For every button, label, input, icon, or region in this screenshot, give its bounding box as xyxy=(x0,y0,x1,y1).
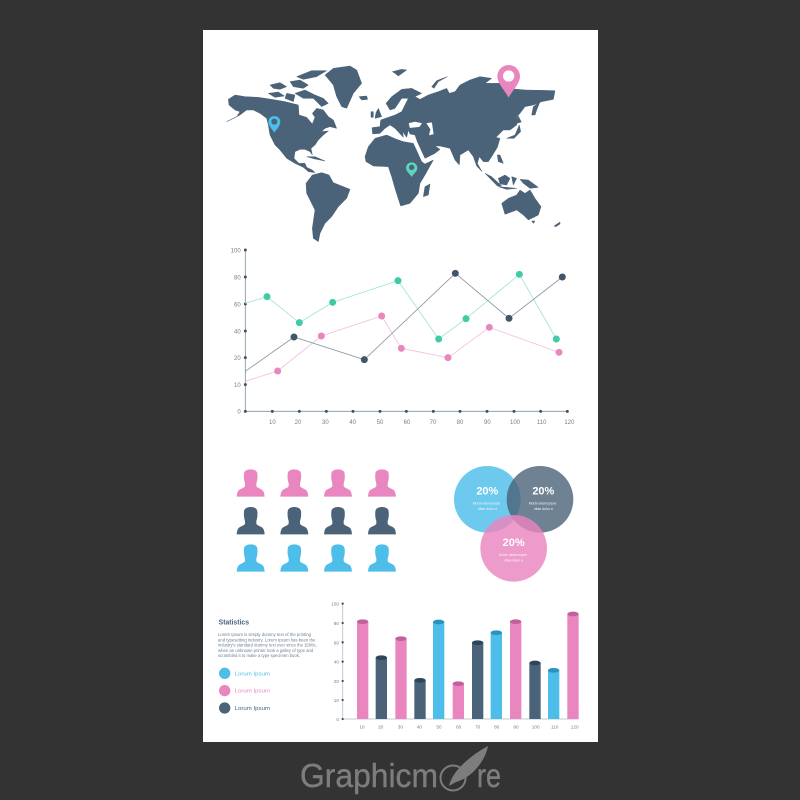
label: dark circle: 20% xyxy=(532,486,555,498)
paragraph: when an unknown printer took a galley of type and xyxy=(218,648,314,653)
axes xyxy=(343,604,578,719)
label: pink circle xyxy=(499,537,528,562)
x axis labels: 110 xyxy=(537,420,547,426)
Australia xyxy=(502,190,541,223)
y axis labels: 100 xyxy=(231,248,241,254)
axis ticks xyxy=(244,248,569,413)
circle: pink xyxy=(480,515,547,582)
logo: Graphicmore watermark: re xyxy=(477,757,501,794)
Africa xyxy=(365,135,433,206)
paragraph: scrambled it to make a type specimen book. xyxy=(218,653,300,658)
label: dark circle: vitae dolor a xyxy=(534,507,553,511)
y axis labels: 10 xyxy=(334,698,339,703)
bar chart xyxy=(331,602,579,730)
Great Britain and Ireland xyxy=(371,108,382,118)
y axis labels: 60 xyxy=(334,640,339,645)
x axis labels: 60 xyxy=(404,420,411,426)
x axis labels xyxy=(269,420,575,426)
x axis labels: 50 xyxy=(377,420,384,426)
y axis labels: 80 xyxy=(334,621,339,626)
x axis labels: 20 xyxy=(378,725,384,730)
legend: dark: Lorum Ipsum xyxy=(235,706,270,712)
y axis labels: 80 xyxy=(234,275,241,281)
x axis labels: 110 xyxy=(551,725,559,730)
paragraph: industry's standard dummy text ever since the 1500s, xyxy=(218,643,317,648)
legend: pink: Lorum Ipsum xyxy=(235,689,270,695)
bars xyxy=(357,612,579,719)
y axis labels: 10 xyxy=(234,383,241,389)
Madagascar xyxy=(423,184,430,197)
y axis ticks xyxy=(341,602,344,720)
y axis labels: 100 xyxy=(331,602,339,607)
x axis labels: 30 xyxy=(322,420,329,426)
icon: feather in O xyxy=(440,746,488,790)
x axis labels: 20 xyxy=(295,420,302,426)
x axis labels: 80 xyxy=(457,420,464,426)
Black Sea xyxy=(409,122,422,128)
y axis labels xyxy=(331,602,339,722)
y axis labels xyxy=(231,248,241,416)
x axis labels: 10 xyxy=(359,725,365,730)
Greenland xyxy=(325,66,362,108)
pin: green xyxy=(406,162,417,177)
x axis labels: 30 xyxy=(398,725,403,730)
x axis labels: 40 xyxy=(349,420,357,426)
legend: blue: Lorum Ipsum xyxy=(235,671,270,677)
panel: white sheet xyxy=(203,30,598,742)
heading: Statistics xyxy=(219,620,249,627)
world map: western hemisphere xyxy=(227,66,368,242)
world map: eastern hemisphere xyxy=(365,65,560,227)
circle: dark xyxy=(507,466,573,533)
label: pink circle: Morbi ullamcorper xyxy=(499,553,528,557)
y axis labels: 0 xyxy=(336,717,339,722)
y axis labels: 40 xyxy=(234,329,241,335)
Caspian Sea xyxy=(427,123,433,135)
circle: blue xyxy=(454,466,521,533)
logo: Graphicmore watermark xyxy=(300,746,501,794)
Eurasia xyxy=(372,77,555,172)
y axis labels: 0 xyxy=(237,410,241,416)
Iceland xyxy=(359,96,368,100)
x axis labels: 60 xyxy=(456,725,462,730)
line chart xyxy=(231,248,575,426)
Southeast Asia islands xyxy=(485,155,517,189)
x axis labels: 80 xyxy=(494,725,500,730)
x axis labels: 120 xyxy=(571,725,579,730)
axes xyxy=(245,250,567,411)
label: pink circle: 20% xyxy=(503,537,525,549)
label: blue circle: vitae dolor a xyxy=(478,507,497,511)
logo: Graphicmore watermark: Graphicm xyxy=(300,757,438,794)
people icon grid xyxy=(237,469,396,572)
x axis labels: 40 xyxy=(417,725,422,730)
paragraph: and typesetting industry. Lorem Ipsum has been the xyxy=(218,637,316,642)
x axis labels: 70 xyxy=(475,725,481,730)
label: blue circle: 20% xyxy=(476,486,499,498)
Novaya Zemlya xyxy=(432,77,447,88)
y axis labels: 20 xyxy=(234,356,241,362)
label: dark circle xyxy=(529,486,557,511)
y axis labels: 20 xyxy=(334,679,339,684)
venn diagram xyxy=(454,466,573,582)
North America xyxy=(227,95,337,173)
pin: blue xyxy=(268,116,280,133)
series: dark xyxy=(245,270,566,371)
label: blue circle xyxy=(473,486,501,511)
label: blue circle: Morbi ullamcorper xyxy=(473,502,501,506)
y axis labels: 60 xyxy=(234,302,241,308)
Japan xyxy=(507,115,521,138)
x axis labels: 120 xyxy=(564,420,575,426)
row: blue people xyxy=(237,544,396,572)
New Zealand xyxy=(554,222,560,227)
label: dark circle: Morbi ullamcorper xyxy=(529,502,557,506)
x axis labels: 100 xyxy=(532,725,540,730)
Arctic islands xyxy=(268,71,328,107)
x axis labels: 90 xyxy=(484,420,491,426)
series: pink xyxy=(245,312,562,381)
x axis labels xyxy=(359,725,579,730)
paragraph xyxy=(218,632,317,658)
statistics text and legend xyxy=(218,620,317,714)
y axis labels: 40 xyxy=(334,660,339,665)
series: green xyxy=(245,271,560,342)
x axis labels: 50 xyxy=(436,725,442,730)
Sakhalin and Kamchatka xyxy=(532,102,540,115)
x axis labels: 90 xyxy=(513,725,519,730)
row: dark people xyxy=(237,507,396,534)
New Guinea xyxy=(520,179,538,188)
x axis labels: 10 xyxy=(269,420,276,426)
paragraph: Lorem Ipsum is simply dummy text of the printing xyxy=(218,632,312,637)
Svalbard xyxy=(392,69,407,76)
x axis labels: 100 xyxy=(510,420,521,426)
x axis labels: 70 xyxy=(430,420,437,426)
pin: pink xyxy=(497,65,520,98)
South America xyxy=(306,173,350,242)
Caribbean xyxy=(307,157,325,161)
row: pink people xyxy=(237,469,396,497)
label: pink circle: vitae dolor a xyxy=(504,558,523,562)
